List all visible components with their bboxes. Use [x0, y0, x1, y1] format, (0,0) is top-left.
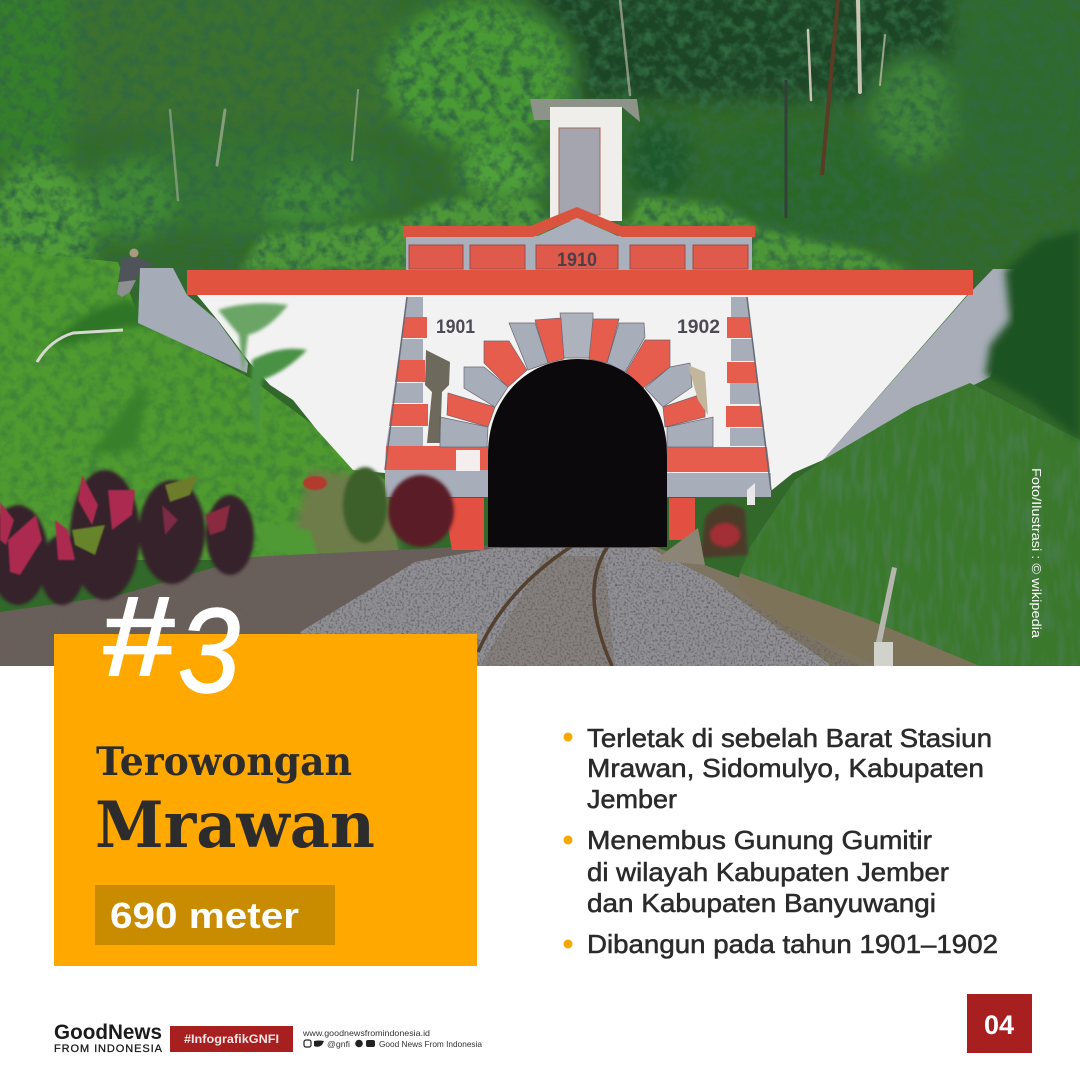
panel: tunnel photograph	[0, 0, 1080, 666]
grey wing walls	[138, 268, 1015, 460]
website and social: Good News From Indonesia	[379, 1039, 482, 1049]
upper pediment	[403, 207, 755, 272]
date 1901: 1901	[436, 317, 475, 338]
hashtag badge	[170, 1026, 293, 1052]
bullet: mountain	[564, 825, 949, 918]
left hillside	[0, 250, 400, 560]
bullet: construction: Dibangun pada tahun 1901–1902	[587, 929, 998, 959]
rank number	[99, 571, 240, 718]
website and social	[302, 1028, 482, 1049]
photo credit: Foto/Ilustrasi : © wikipedia	[1029, 468, 1043, 638]
bullet: mountain: di wilayah Kabupaten Jember	[587, 857, 949, 887]
logo: GoodNews: FROM INDONESIA	[54, 1043, 163, 1055]
forest background	[0, 0, 1080, 666]
date 1902: 1902	[677, 317, 720, 338]
bullet list	[564, 723, 998, 959]
tunnel mouth	[488, 359, 667, 547]
plants near the portal	[303, 467, 748, 565]
foliage texture	[0, 0, 1080, 330]
left pier	[385, 297, 488, 550]
main red cornice	[187, 270, 973, 295]
white retaining wall	[197, 295, 967, 490]
rank number: #	[99, 571, 176, 701]
marker post	[874, 567, 897, 666]
website and social: www.goodnewsfromindonesia.id	[302, 1028, 430, 1038]
logo: GoodNews: GoodNews	[54, 1021, 162, 1044]
dark bush on the right	[985, 230, 1080, 440]
rank number: 3	[178, 584, 240, 718]
bullet: location: Mrawan, Sidomulyo, Kabupaten	[587, 753, 984, 783]
kilometre marker	[747, 483, 755, 505]
ground and ballast	[0, 545, 880, 666]
grass on top of the portal	[240, 195, 915, 272]
right pier	[667, 297, 771, 540]
hashtag badge: #InfografikGNFI	[184, 1032, 279, 1046]
right grass bank and ditch	[735, 230, 1080, 666]
tunnel name: Mrawan	[95, 788, 375, 863]
bullet: mountain: dan Kabupaten Banyuwangi	[587, 888, 936, 918]
subtitle: Terowongan	[96, 739, 352, 785]
panel: title card	[54, 571, 477, 966]
tree trunks	[170, 0, 885, 200]
bullet: location: Terletak di sebelah Barat Stasiun	[587, 723, 992, 753]
saplings by the wall	[218, 303, 307, 440]
website and social: @gnfi	[327, 1039, 350, 1049]
length badge	[95, 885, 335, 945]
page number	[967, 994, 1032, 1053]
bullet: location: Jember	[587, 784, 677, 814]
logo: GoodNews	[54, 1021, 163, 1055]
red-leaved plants on the left	[0, 470, 254, 605]
man sitting on the wall	[117, 248, 155, 297]
damaged plaster	[425, 350, 708, 443]
page number: 04	[984, 1010, 1014, 1040]
bullet: mountain: Menembus Gunung Gumitir	[587, 825, 932, 855]
footer	[54, 994, 1032, 1055]
bullet: location	[564, 723, 992, 814]
date 1910: 1910	[557, 250, 597, 271]
portal structure	[138, 99, 1015, 550]
arch voussoirs	[440, 313, 713, 447]
tower	[530, 99, 640, 221]
length badge: 690 meter	[110, 895, 299, 936]
notice board	[456, 450, 480, 471]
